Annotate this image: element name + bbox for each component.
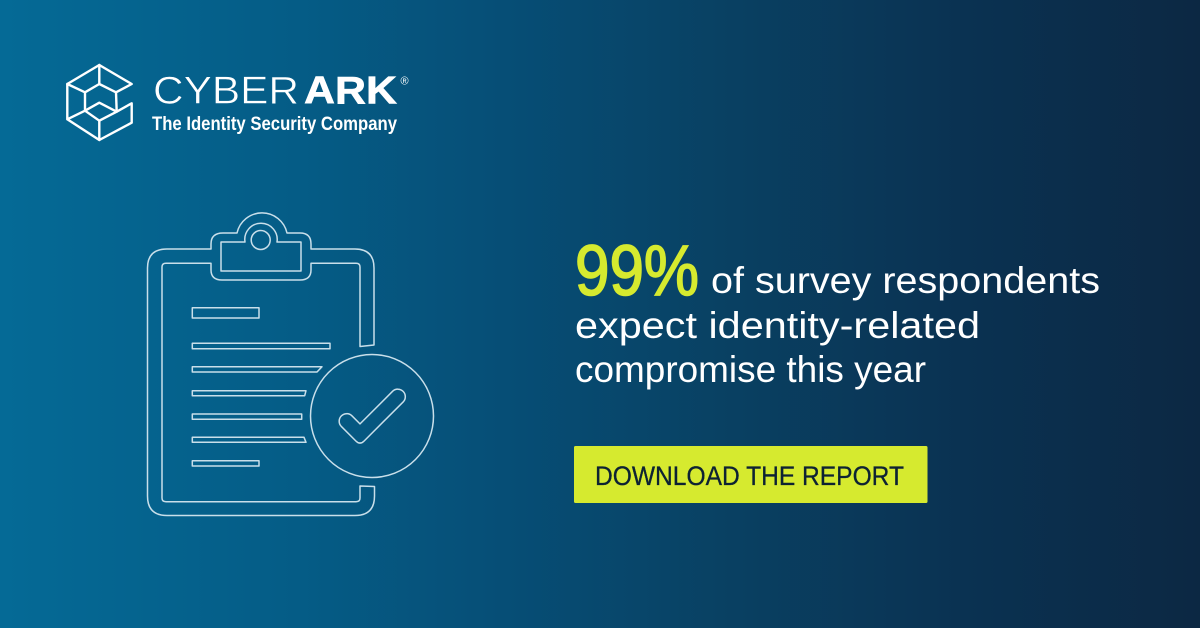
headline text: expect identity-related	[575, 305, 980, 346]
wordmark: CYBER	[153, 69, 299, 112]
headline text	[575, 260, 1100, 390]
wordmark: ®	[400, 76, 409, 88]
clip inner	[221, 223, 301, 271]
headline text: of survey respondents	[711, 260, 1100, 301]
tagline: The Identity Security Company	[152, 113, 397, 135]
icon: logo cube	[67, 65, 132, 140]
logo: CyberArk	[67, 65, 409, 140]
button: download the report: DOWNLOAD THE REPORT	[595, 461, 904, 491]
button: download the report	[574, 446, 928, 503]
clip hole	[251, 230, 270, 250]
wordmark: ARK	[304, 69, 397, 112]
wordmark	[153, 69, 409, 112]
clipboard board and clip outline	[148, 213, 374, 516]
stat: 99%: 99%	[575, 232, 699, 311]
icon: clipboard with check mark	[148, 213, 434, 516]
check badge	[310, 354, 434, 478]
headline	[575, 232, 1100, 390]
text lines	[192, 308, 330, 466]
headline text: compromise this year	[575, 349, 926, 390]
